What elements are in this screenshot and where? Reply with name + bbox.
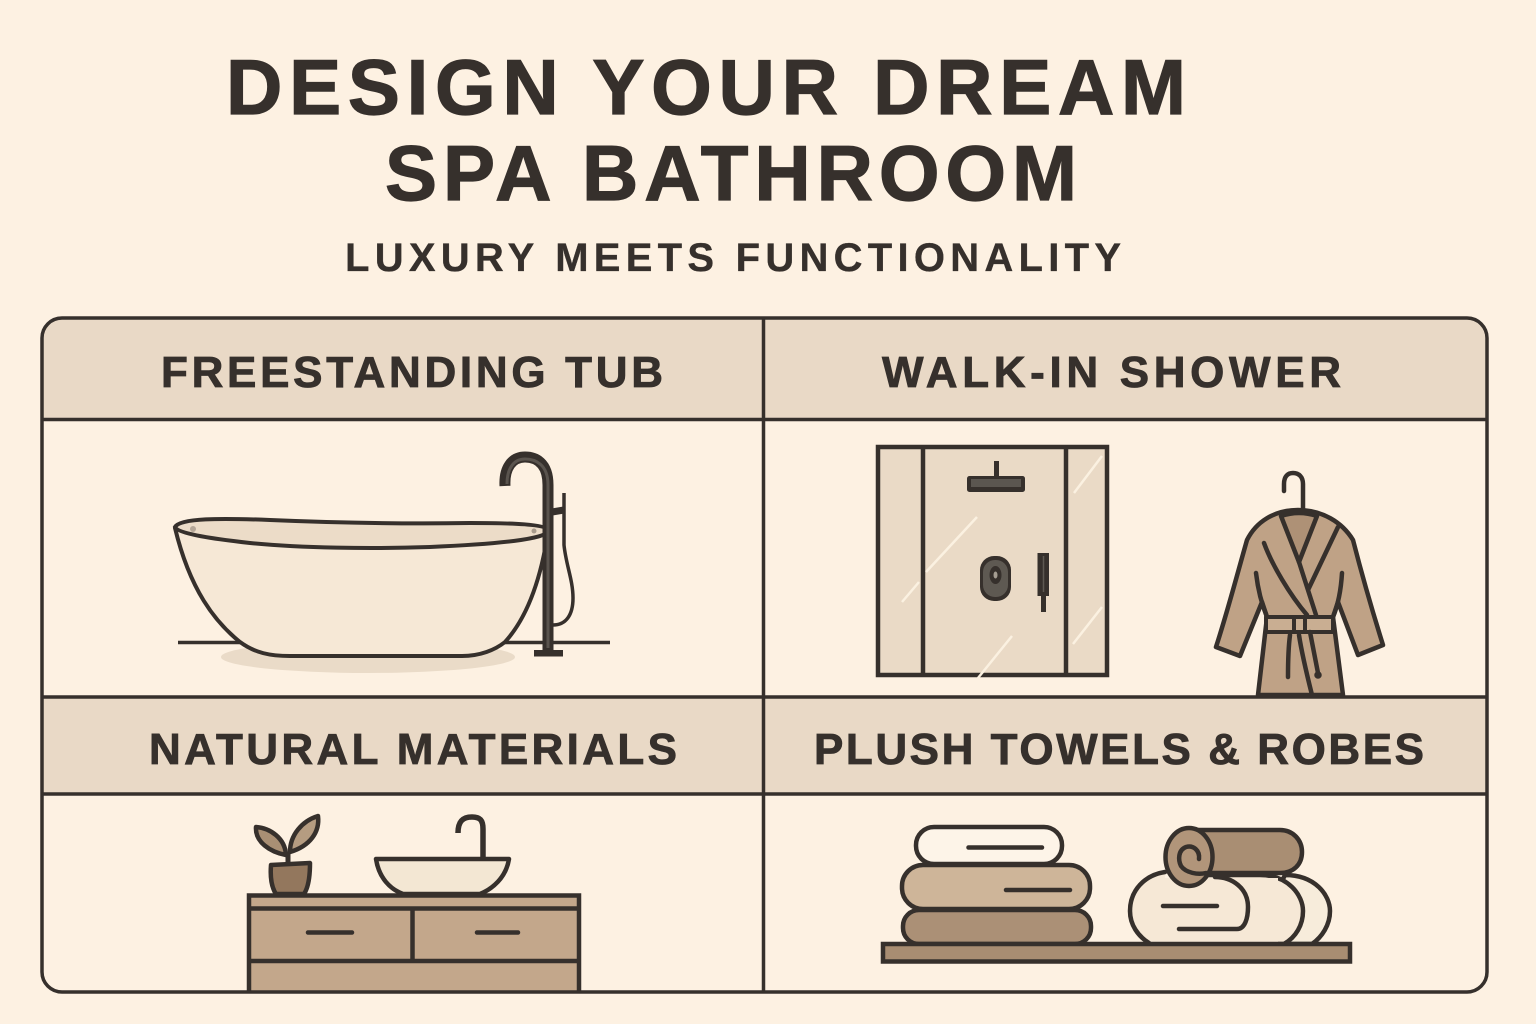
faucet: [505, 457, 573, 656]
subtitle: LUXURY MEETS FUNCTIONALITY: [345, 236, 1121, 280]
icon: shelf: [883, 944, 1350, 962]
heading: natural materials: NATURAL MATERIALS: [149, 725, 677, 774]
heading: freestanding tub: FREESTANDING TUB: [161, 348, 663, 397]
header band: bottom row: [42, 697, 1487, 794]
icon: vanity cabinet: [249, 896, 579, 996]
shower handle: [1038, 553, 1049, 612]
icon: robe: [1216, 473, 1383, 695]
icon: potted plant: [256, 816, 318, 894]
title: SPA BATHROOM: [385, 129, 1077, 217]
panel border: [42, 318, 1487, 992]
title: [226, 43, 1186, 217]
header band: top row: [42, 318, 1487, 419]
shower valve: [980, 556, 1011, 601]
icon: rolled towels: [1130, 828, 1330, 944]
icon: walk-in shower: [878, 447, 1107, 678]
heading: walk-in shower: WALK-IN SHOWER: [882, 348, 1341, 397]
title: DESIGN YOUR DREAM: [226, 43, 1186, 131]
panel: feature grid: [42, 318, 1487, 996]
heading: plush towels and robes: PLUSH TOWELS & ROBES: [814, 725, 1424, 774]
icon: vessel sink: [376, 817, 509, 894]
icon: freestanding tub: [175, 457, 610, 673]
icon: folded towel stack: [902, 827, 1091, 944]
shower head: [967, 461, 1025, 492]
